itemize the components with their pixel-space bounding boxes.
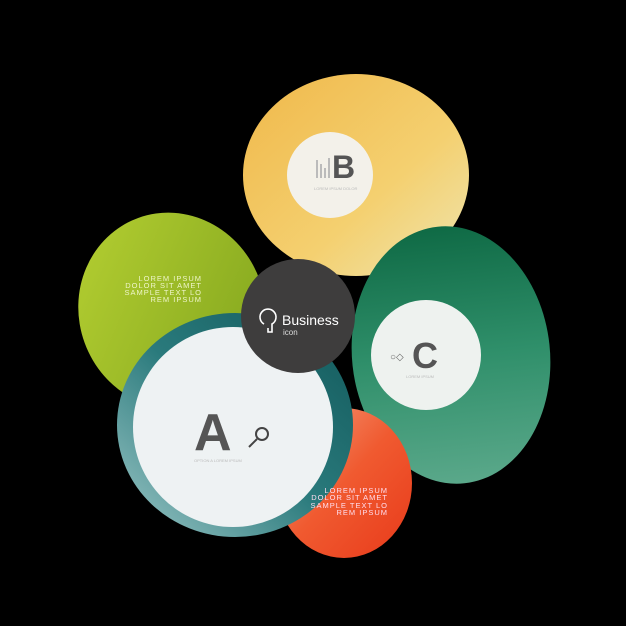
text: lime: LOREM IPSUM	[138, 274, 202, 283]
C circle: LOREM IPSUM	[406, 374, 434, 379]
C circle: ○◇	[390, 352, 404, 363]
text: lime: DOLOR SIT AMET	[125, 281, 202, 290]
text: lime: SAMPLE TEXT LO	[124, 288, 202, 297]
panel: red	[276, 408, 412, 558]
A circle: A	[194, 404, 232, 462]
text: lime	[124, 274, 202, 304]
A circle	[133, 327, 333, 527]
panel: green C	[339, 216, 563, 494]
panel: yellow B	[243, 74, 469, 276]
A circle: OPTION A LOREM IPSUM	[194, 458, 242, 463]
panel: teal A	[117, 313, 353, 537]
panel: business circle: Business	[282, 312, 339, 328]
text: red: REM IPSUM	[336, 508, 388, 517]
text: red: DOLOR SIT AMET	[311, 493, 388, 502]
C circle: C	[412, 335, 438, 376]
panel: business circle	[241, 259, 355, 373]
text: lime: REM IPSUM	[150, 295, 202, 304]
B circle	[287, 132, 373, 218]
B circle: LOREM IPSUM DOLOR	[314, 186, 357, 191]
text: red	[310, 486, 388, 517]
text: red: SAMPLE TEXT LO	[310, 501, 388, 510]
icon: bulb	[260, 309, 276, 332]
icon: magnifier	[249, 428, 268, 447]
C circle	[371, 300, 481, 410]
text: red: LOREM IPSUM	[324, 486, 388, 495]
B circle: B	[332, 149, 355, 185]
panel: business circle: icon	[283, 328, 298, 337]
panel: lime	[51, 186, 293, 436]
